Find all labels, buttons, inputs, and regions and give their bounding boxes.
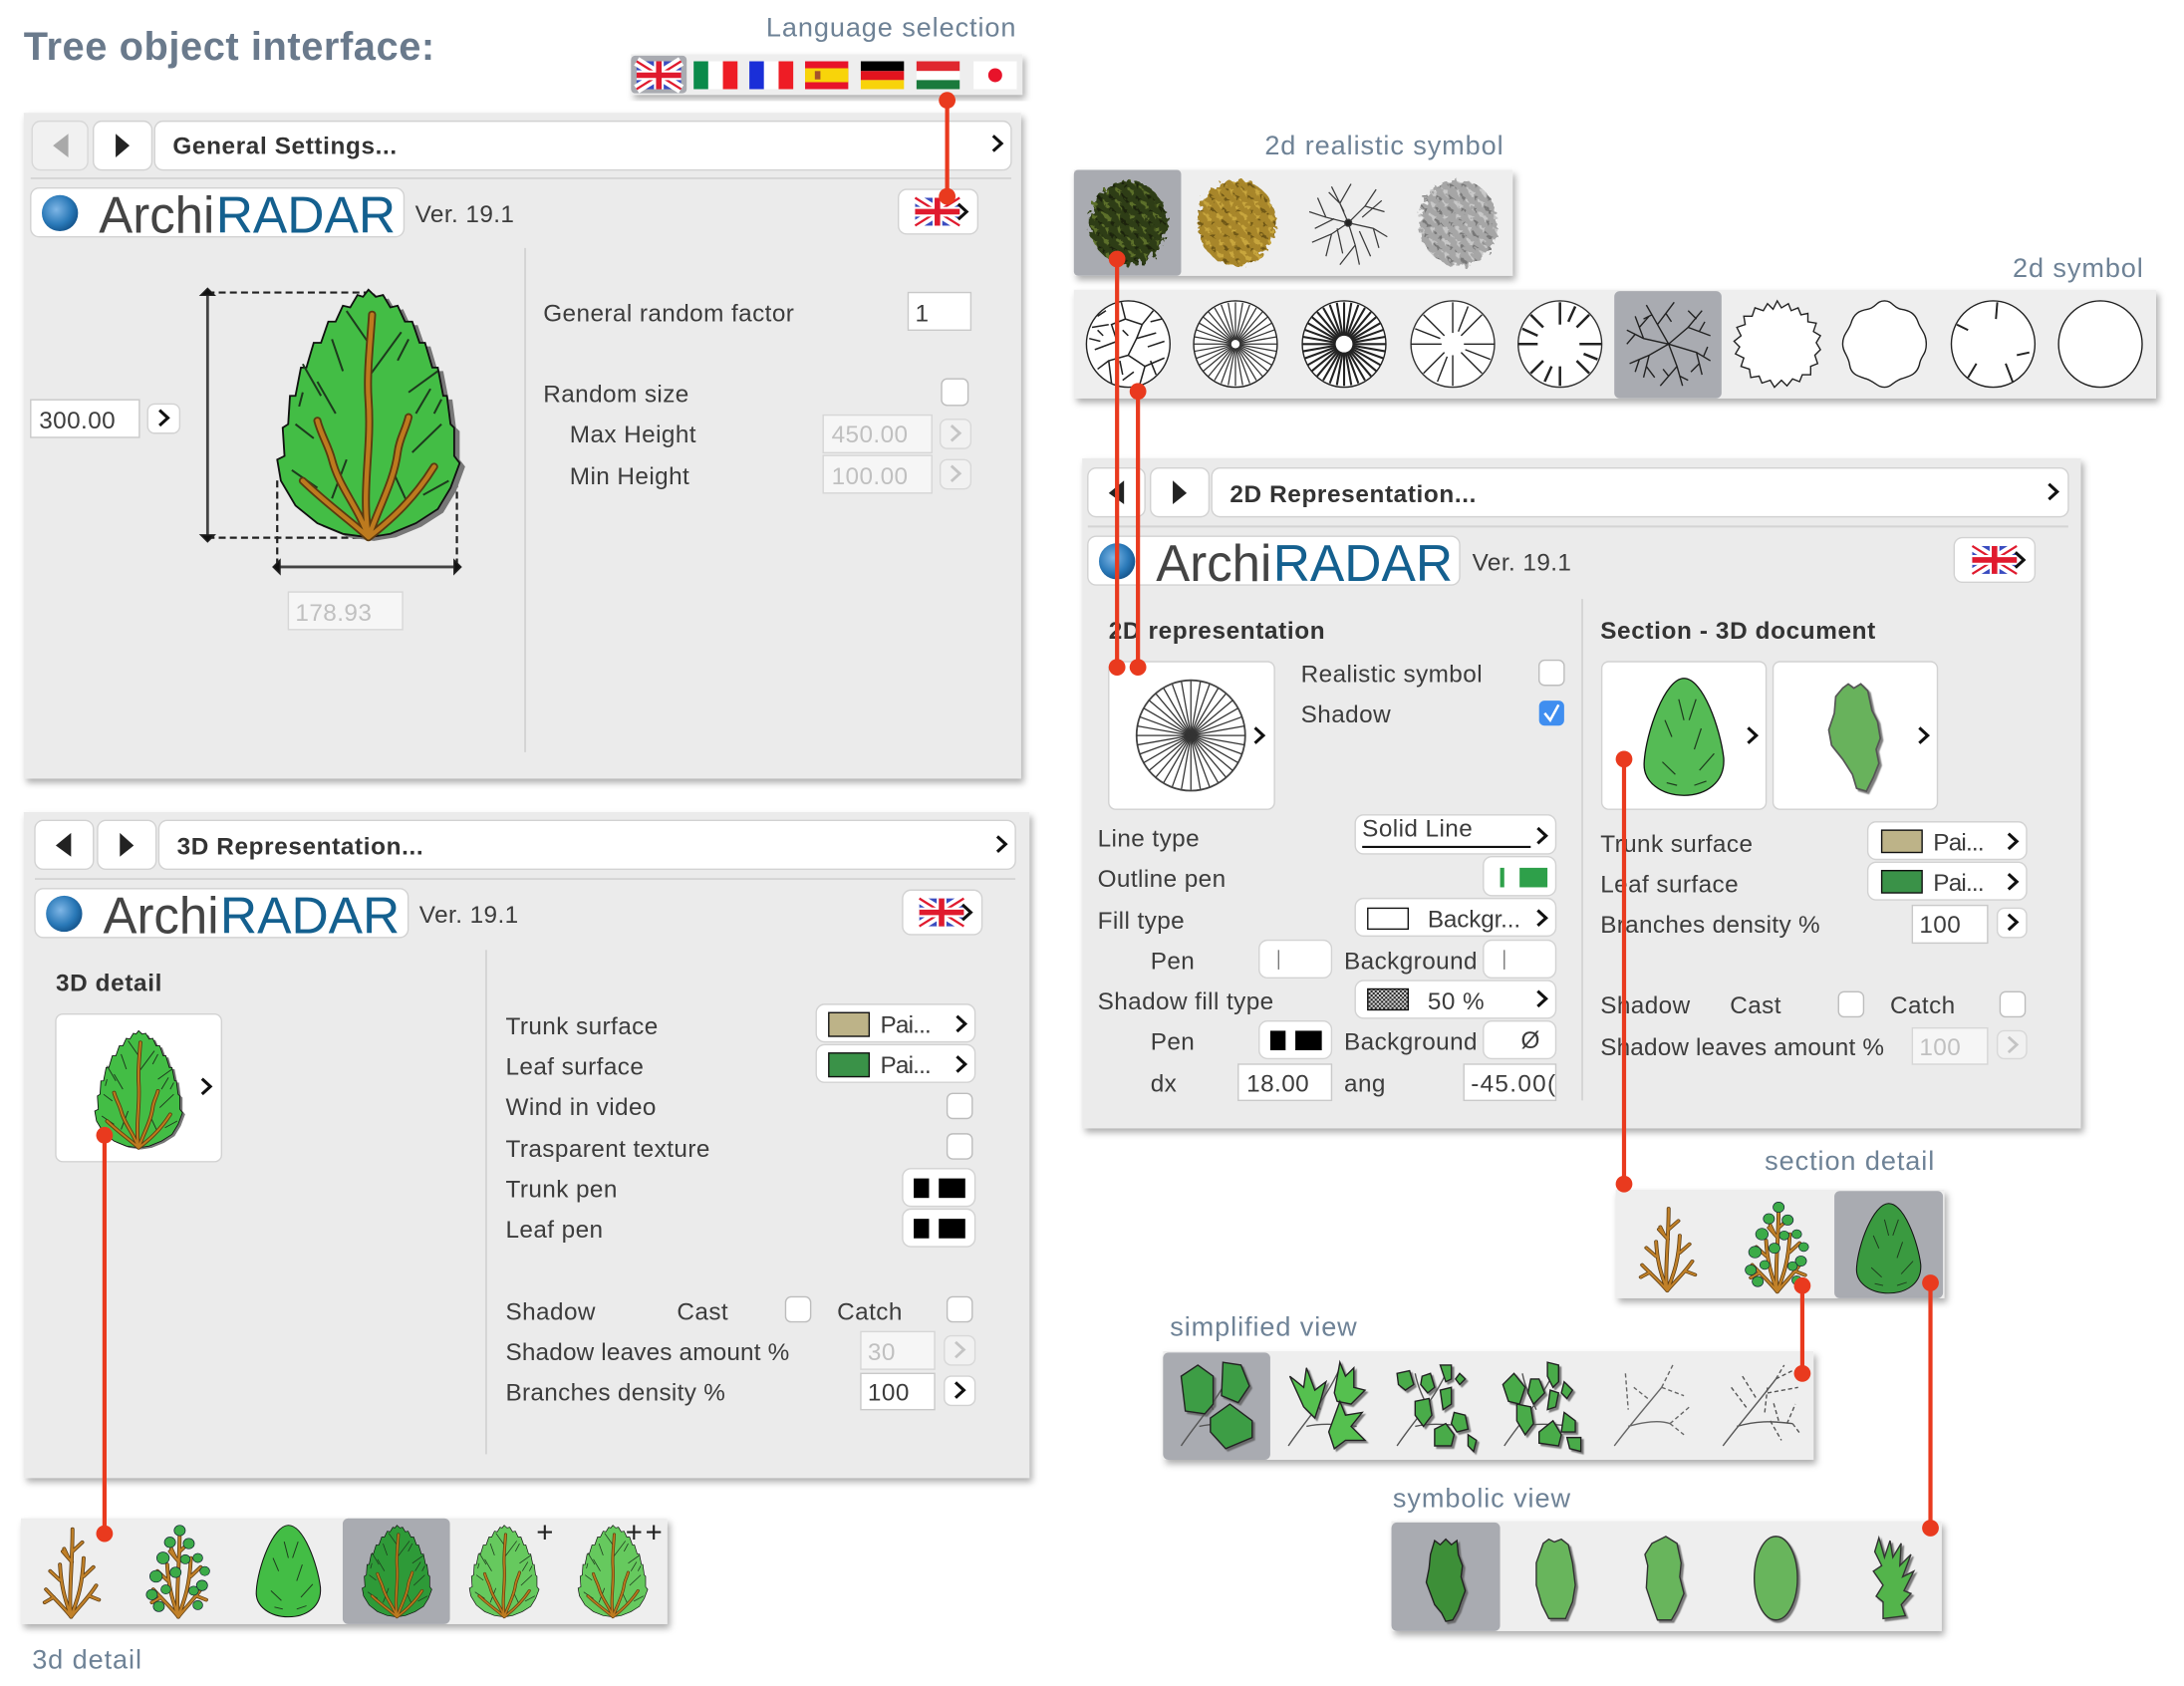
trunk surface row: Pai... bbox=[881, 1012, 932, 1039]
flag: Italy bbox=[693, 62, 737, 89]
panel background bbox=[1082, 458, 2080, 1128]
flag: Germany bbox=[861, 62, 904, 89]
section dropdown: 2D Representation... bbox=[1229, 481, 1477, 508]
section leaf surface row: Pai... bbox=[1933, 870, 1985, 897]
panel background bbox=[24, 812, 1029, 1478]
outline pen row bbox=[1098, 857, 1555, 896]
bar: simplified view bbox=[1163, 1351, 1813, 1460]
section shadow row: Cast bbox=[1730, 992, 1781, 1019]
flag: Hungary bbox=[917, 62, 959, 89]
selected highlight bbox=[1834, 1191, 1943, 1298]
icon: bare branches bbox=[1641, 1209, 1695, 1290]
min height: 100.00 bbox=[832, 463, 908, 490]
ArchiRADAR logo: Archi bbox=[99, 185, 214, 243]
selected highlight bbox=[1392, 1523, 1501, 1631]
label: random size bbox=[543, 379, 968, 408]
symbol: wavy outline bbox=[1842, 301, 1926, 388]
shadow fill type row: 50 % bbox=[1428, 988, 1485, 1015]
icon: branches with leaf balls bbox=[1746, 1202, 1808, 1291]
width input: 178.93 bbox=[295, 600, 372, 627]
icon: detailed tree plus plus bbox=[578, 1526, 648, 1617]
icon: bare branches bbox=[45, 1530, 99, 1617]
transparent texture row: Trasparent texture bbox=[505, 1136, 710, 1163]
bar: 2d realistic symbols bbox=[1074, 170, 1512, 276]
flag: United Kingdom bbox=[637, 62, 682, 89]
section dropdown: General Settings... bbox=[172, 134, 398, 160]
heading: section 3D document: Section - 3D document bbox=[1600, 618, 1876, 645]
icon: detailed tree selected bbox=[363, 1526, 431, 1617]
nav forward button bbox=[98, 820, 156, 869]
section dropdown bbox=[158, 820, 1015, 869]
max height: 450.00 bbox=[832, 422, 908, 448]
height input bbox=[31, 400, 179, 437]
symbol: circle with notches bbox=[1951, 301, 2035, 388]
shadow row: Catch bbox=[837, 1299, 903, 1326]
nav back button bbox=[35, 820, 94, 869]
symbol: jagged outline bbox=[1734, 301, 1820, 388]
icon: bare twig bbox=[1614, 1365, 1690, 1446]
nav forward button bbox=[1151, 468, 1209, 517]
symbol: wide notched bbox=[1518, 301, 1602, 388]
icon: dark spiky crown bbox=[1426, 1540, 1466, 1621]
plus mark: + bbox=[536, 1516, 553, 1548]
section shadow leaves amount row bbox=[1600, 1028, 2027, 1064]
section branches density row bbox=[1600, 906, 2027, 943]
2D symbol thumbnail bbox=[1109, 662, 1274, 809]
icon: smooth crown bbox=[256, 1526, 321, 1617]
max height bbox=[570, 416, 970, 452]
ArchiRADAR logo bbox=[31, 185, 404, 243]
ArchiRADAR logo: Archi bbox=[104, 887, 219, 945]
section shadow leaves amount row: Shadow leaves amount % bbox=[1600, 1034, 1884, 1061]
leaf surface row: Pai... bbox=[881, 1052, 932, 1079]
icon: grass-like crown bbox=[1873, 1538, 1914, 1618]
ArchiRADAR logo bbox=[35, 887, 409, 945]
section leaf surface row bbox=[1600, 862, 2027, 900]
fill pen row: Pen bbox=[1151, 948, 1195, 975]
connector: simplified view bbox=[1794, 1277, 1810, 1382]
connector: symbolic view bbox=[1922, 1274, 1939, 1537]
leaf surface row: Leaf surface bbox=[505, 1054, 644, 1081]
caption: 2d realistic symbol: 2d realistic symbol bbox=[1264, 130, 1504, 160]
fill pen row bbox=[1151, 941, 1555, 978]
line type row bbox=[1098, 815, 1555, 854]
shadow row with checked box: Shadow bbox=[1301, 702, 1391, 728]
shadow pen row: Ø bbox=[1521, 1027, 1540, 1054]
panel: General Settings bbox=[24, 113, 1021, 778]
connector: 3d detail bbox=[97, 1127, 113, 1542]
section shadow row bbox=[1600, 991, 2026, 1019]
section dropdown: 3D Representation... bbox=[177, 834, 423, 861]
selected highlight bbox=[343, 1519, 450, 1624]
icon: detailed tree plus bbox=[469, 1526, 539, 1617]
icon: green spiky crown bbox=[1536, 1540, 1575, 1618]
section trunk surface row: Pai... bbox=[1933, 830, 1985, 857]
bar: section detail bbox=[1616, 1190, 1945, 1298]
wind in video row bbox=[505, 1093, 972, 1121]
version: Ver. 19.1 bbox=[419, 902, 519, 929]
section branches density row: Branches density % bbox=[1600, 912, 1820, 939]
symbol: fine spokes bbox=[1194, 301, 1277, 388]
branches density row: Branches density % bbox=[505, 1380, 725, 1407]
section leaf surface row: Leaf surface bbox=[1600, 871, 1739, 898]
shadow fill type row bbox=[1098, 981, 1555, 1018]
shadow pen row: Background bbox=[1344, 1028, 1478, 1055]
icon: large polygon leaves bbox=[1181, 1362, 1252, 1449]
language button bbox=[899, 189, 977, 234]
icon: gray canopy bbox=[1420, 179, 1498, 266]
nav back button bbox=[1088, 468, 1145, 517]
tree front view bbox=[277, 290, 465, 541]
label: general random factor: 1 bbox=[915, 300, 929, 327]
offsets row: ang bbox=[1344, 1070, 1386, 1097]
bar: 2d symbols bbox=[1074, 290, 2156, 399]
trunk surface row bbox=[505, 1004, 975, 1042]
icon: dense twig bbox=[1723, 1365, 1801, 1446]
bar background bbox=[1616, 1190, 1945, 1298]
symbol: plain circle bbox=[2058, 301, 2142, 388]
shadow leaves amount row bbox=[505, 1331, 975, 1369]
section shadow row: Shadow bbox=[1600, 992, 1691, 1019]
caption: section detail: section detail bbox=[1765, 1145, 1935, 1176]
branches density row bbox=[505, 1373, 975, 1410]
bar: symbolic view bbox=[1392, 1521, 1942, 1631]
caption: symbolic view: symbolic view bbox=[1393, 1483, 1571, 1514]
offsets row: -45.00( bbox=[1471, 1070, 1555, 1097]
connector: 2d symbol bbox=[1130, 383, 1147, 676]
section trunk surface row bbox=[1600, 822, 2027, 859]
section dropdown bbox=[1212, 468, 2068, 517]
leaf pen row bbox=[505, 1209, 975, 1247]
symbolic view thumbnail bbox=[1774, 662, 1938, 809]
icon: branches with leaf balls bbox=[146, 1526, 209, 1617]
outline pen row: Outline pen bbox=[1098, 866, 1227, 893]
language button bbox=[1954, 538, 2035, 582]
shadow pen row bbox=[1151, 1021, 1555, 1058]
shadow leaves amount row: 30 bbox=[868, 1339, 896, 1366]
heading: 3D detail: 3D detail bbox=[56, 971, 162, 997]
trunk surface row: Trunk surface bbox=[505, 1013, 659, 1040]
selected highlight bbox=[1074, 170, 1181, 276]
label: general random factor bbox=[543, 293, 970, 330]
symbol: heavy spokes bbox=[1302, 301, 1386, 388]
shadow row: Cast bbox=[677, 1299, 728, 1326]
leaf pen row: Leaf pen bbox=[505, 1217, 603, 1244]
caption: language selection: Language selection bbox=[766, 11, 1016, 42]
min height bbox=[570, 455, 970, 493]
flag: Japan bbox=[973, 62, 1017, 89]
symbol: sparse spokes bbox=[1411, 301, 1495, 388]
icon: wavy crown bbox=[1645, 1537, 1684, 1620]
fill type row: Backgr... bbox=[1428, 906, 1521, 933]
symbol: branching selected bbox=[1627, 302, 1711, 386]
realistic symbol row: Realistic symbol bbox=[1301, 661, 1483, 688]
language flags bar bbox=[631, 55, 1022, 95]
bar background bbox=[1392, 1521, 1942, 1631]
branches density row: 100 bbox=[868, 1380, 910, 1407]
nav back button bbox=[32, 122, 88, 170]
height input: 300.00 bbox=[39, 408, 116, 434]
icon: scattered small polygons bbox=[1397, 1365, 1477, 1452]
shadow row with checked box bbox=[1301, 701, 1564, 728]
shadow leaves amount row: Shadow leaves amount % bbox=[505, 1339, 790, 1366]
connector: language selection bbox=[939, 92, 956, 204]
section branches density row: 100 bbox=[1919, 912, 1961, 939]
caption: simplified view: simplified view bbox=[1170, 1311, 1358, 1342]
selected flag highlight bbox=[631, 56, 686, 94]
min height: Min Height bbox=[570, 463, 689, 490]
nav forward button bbox=[94, 122, 151, 170]
wind in video row: Wind in video bbox=[505, 1094, 657, 1121]
line type row: Line type bbox=[1098, 825, 1200, 852]
flags bar background bbox=[631, 55, 1022, 95]
connector: 2d realistic symbol bbox=[1109, 251, 1126, 676]
bar background bbox=[1074, 290, 2156, 399]
section dropdown bbox=[154, 122, 1011, 170]
line type row: Solid Line bbox=[1362, 816, 1473, 843]
section symbol thumbnail bbox=[1602, 662, 1767, 809]
bar background bbox=[1163, 1351, 1813, 1460]
section shadow leaves amount row: 100 bbox=[1919, 1034, 1961, 1061]
icon: mixed polygons bbox=[1502, 1362, 1581, 1452]
version: Ver. 19.1 bbox=[1473, 550, 1571, 577]
flag: Spain bbox=[805, 62, 848, 89]
icon: star leaves bbox=[1288, 1362, 1365, 1449]
connector: section detail bbox=[1616, 750, 1632, 1193]
caption: 2d symbol: 2d symbol bbox=[2013, 252, 2144, 283]
fill type row: Fill type bbox=[1098, 908, 1185, 935]
language button bbox=[903, 890, 982, 935]
panel background bbox=[24, 113, 1021, 778]
icon: smooth oval crown bbox=[1755, 1537, 1797, 1620]
caption: 3d detail: 3d detail bbox=[32, 1644, 142, 1675]
panel: 2D Representation bbox=[1082, 458, 2080, 1128]
offsets row: 18.00 bbox=[1246, 1070, 1309, 1097]
trunk pen row: Trunk pen bbox=[505, 1177, 618, 1204]
width input bbox=[288, 592, 403, 630]
heading: 2D representation: 2D representation bbox=[1109, 618, 1325, 645]
ArchiRADAR logo: RADAR bbox=[1273, 534, 1453, 592]
max height: Max Height bbox=[570, 422, 696, 448]
label: random size: Random size bbox=[543, 381, 689, 408]
shadow row: Shadow bbox=[505, 1299, 596, 1326]
leaf surface row bbox=[505, 1044, 975, 1082]
bar background bbox=[21, 1519, 668, 1624]
flag: France bbox=[749, 62, 793, 89]
dimension lines bbox=[200, 288, 461, 574]
bar background bbox=[1074, 170, 1512, 276]
icon: yellow canopy bbox=[1198, 179, 1276, 266]
ArchiRADAR logo bbox=[1088, 534, 1460, 592]
ArchiRADAR logo: RADAR bbox=[220, 887, 400, 945]
panel: 3D Representation bbox=[24, 812, 1029, 1478]
fill pen row: Background bbox=[1344, 948, 1478, 975]
shadow fill type row: Shadow fill type bbox=[1098, 988, 1274, 1015]
label: general random factor: General random factor bbox=[543, 300, 794, 327]
ArchiRADAR logo: Archi bbox=[1156, 534, 1271, 592]
selected highlight bbox=[1163, 1352, 1270, 1460]
section shadow row: Catch bbox=[1890, 992, 1956, 1019]
symbol: cracked bbox=[1086, 301, 1170, 388]
title: Tree object interface: bbox=[24, 25, 435, 69]
offsets row: dx bbox=[1151, 1070, 1177, 1097]
icon: smooth dark crown bbox=[1856, 1204, 1921, 1293]
transparent texture row bbox=[505, 1134, 972, 1163]
bar: 3d detail options bbox=[21, 1516, 668, 1624]
version: Ver. 19.1 bbox=[415, 201, 514, 228]
offsets row bbox=[1151, 1064, 1555, 1100]
3D detail thumbnail bbox=[56, 1014, 221, 1162]
trunk pen row bbox=[505, 1169, 975, 1207]
realistic symbol row bbox=[1301, 661, 1564, 688]
icon: bare canopy bbox=[1309, 184, 1387, 265]
shadow row bbox=[505, 1296, 972, 1326]
section trunk surface row: Trunk surface bbox=[1600, 831, 1753, 858]
icon: dark green canopy bbox=[1089, 181, 1167, 265]
selected highlight bbox=[1614, 291, 1722, 399]
shadow pen row: Pen bbox=[1151, 1028, 1195, 1055]
ArchiRADAR logo: RADAR bbox=[216, 185, 396, 243]
fill type row bbox=[1098, 899, 1555, 936]
double plus mark: ++ bbox=[626, 1516, 666, 1548]
